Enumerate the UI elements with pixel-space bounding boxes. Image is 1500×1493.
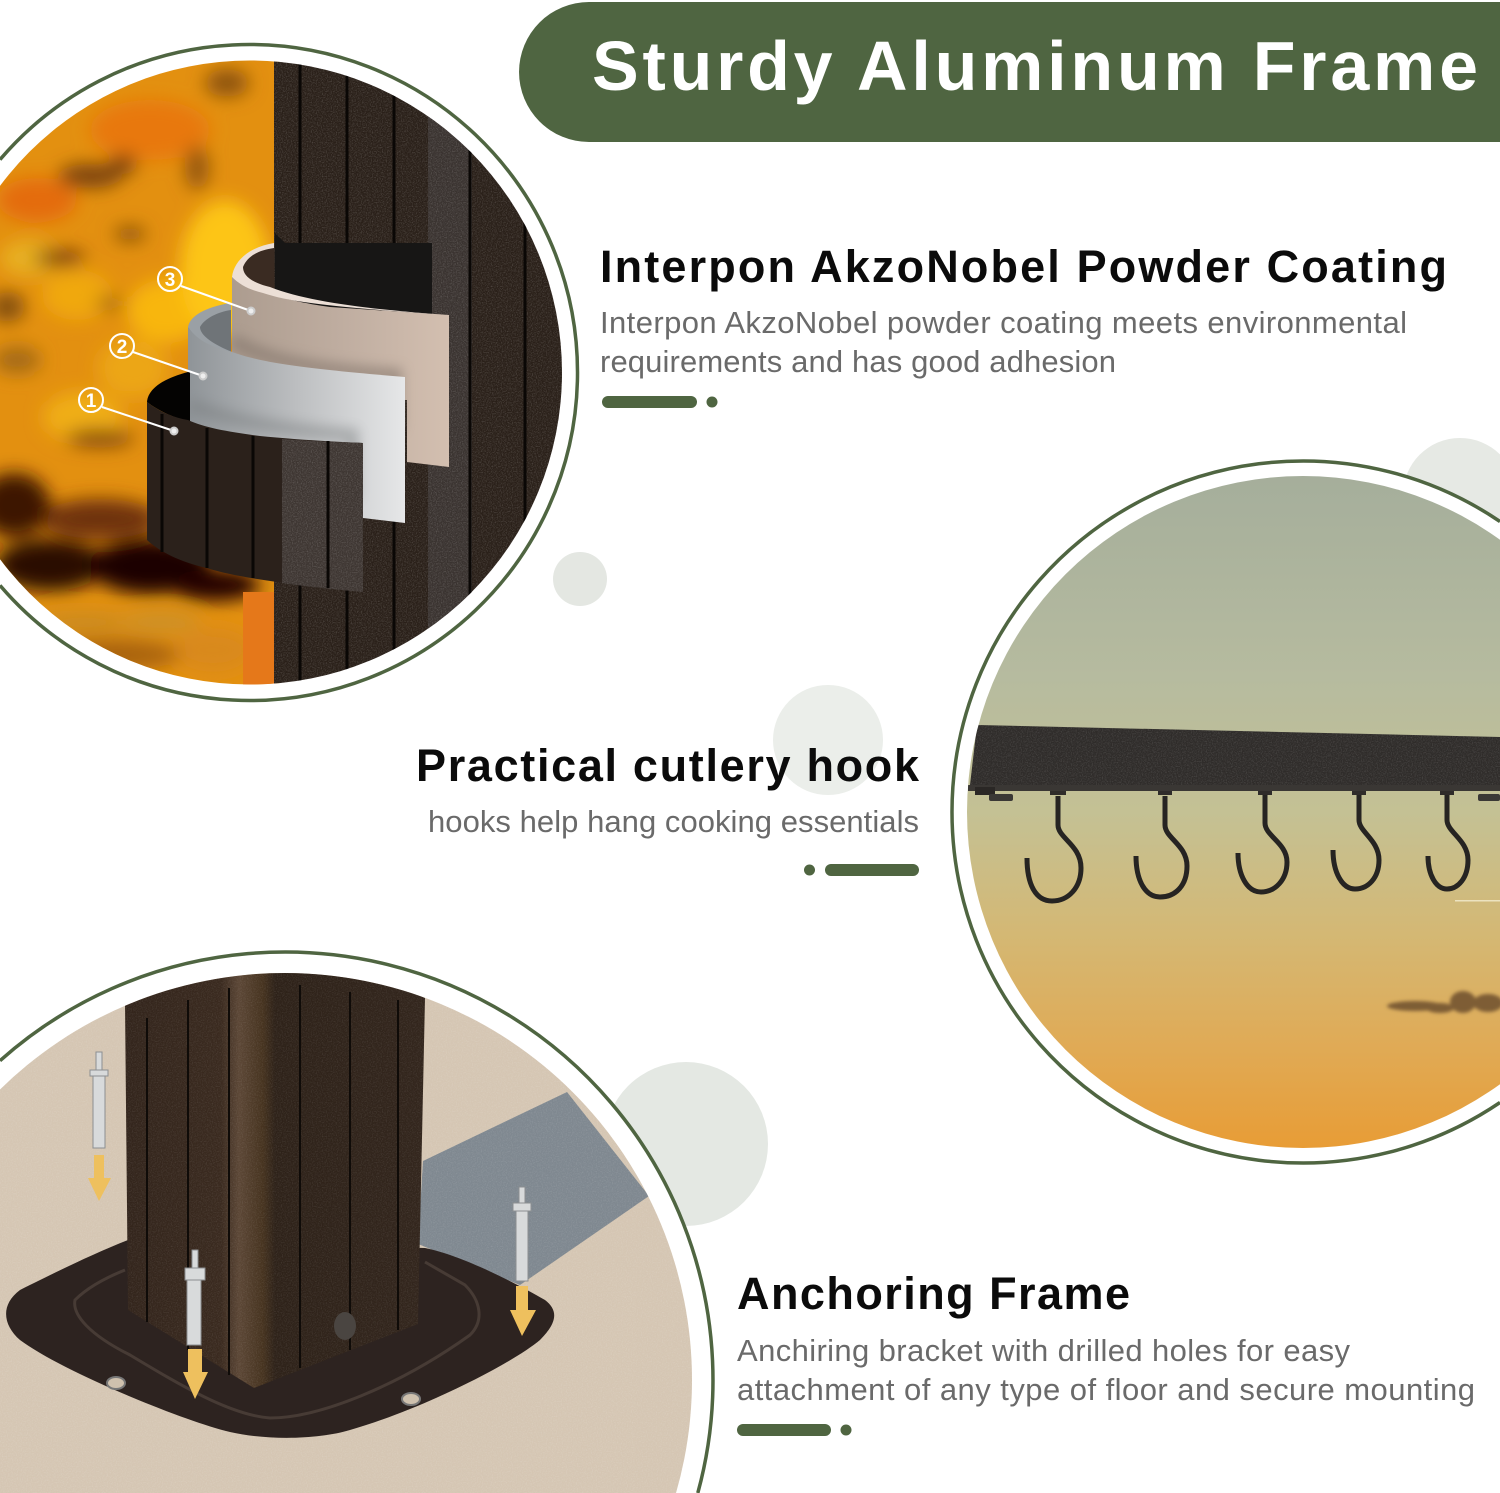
aluminium post <box>274 50 574 700</box>
text block: powder coating: Interpon AkzoNobel Powder Coating <box>600 241 1447 292</box>
panel: anchoring base photo <box>0 952 713 1493</box>
text block: cutlery hook <box>416 740 920 876</box>
callout numbers 1, 2, 3: 1 <box>86 391 97 412</box>
panel: powder coating cross-section photo <box>0 44 578 700</box>
faint line <box>1455 900 1500 902</box>
fire background <box>0 55 280 692</box>
decorative circle: lower middle <box>604 1062 768 1226</box>
concrete ground <box>0 970 700 1493</box>
post shadow <box>418 1092 649 1285</box>
layer 2: grey coat <box>188 303 405 523</box>
text block: cutlery hook: Practical cutlery hook <box>416 740 920 791</box>
anchor bolts <box>90 1052 531 1345</box>
panel: cutlery hooks photo <box>952 461 1500 1163</box>
text block: anchoring frame: Anchoring Frame <box>737 1268 1130 1319</box>
text block: powder coating <box>600 241 1447 408</box>
text block: cutlery hook: hooks help hang cooking essentials <box>428 804 919 839</box>
callout numbers 1, 2, 3: 3 <box>165 270 175 291</box>
layer 3: black inner and beige coat <box>232 233 449 467</box>
decorative circle: behind hook heading <box>773 685 883 795</box>
post <box>125 972 425 1388</box>
cloud <box>1387 991 1500 1013</box>
text block: powder coating: requirements and has good adhesion <box>600 344 1116 379</box>
text block: powder coating: Interpon AkzoNobel powder coating meets environmental <box>600 305 1407 340</box>
title banner: Sturdy Aluminum Frame <box>592 27 1478 105</box>
roof beam <box>968 725 1500 801</box>
base plate <box>6 1240 554 1438</box>
callout numbers 1, 2, 3 <box>79 267 254 434</box>
title banner <box>519 2 1500 142</box>
hooks <box>1027 795 1468 901</box>
text block: anchoring frame: attachment of any type of floor and secure mounting <box>737 1372 1475 1407</box>
sunset sky <box>960 475 1500 1150</box>
decorative circle: top right <box>1403 438 1500 552</box>
decorative circle: small <box>553 552 607 606</box>
layer 1: brown outer coat <box>147 372 363 592</box>
text block: anchoring frame: Anchiring bracket with drilled holes for easy <box>737 1333 1350 1368</box>
text block: anchoring frame <box>737 1268 1475 1436</box>
yellow arrows <box>88 1155 536 1399</box>
callout numbers 1, 2, 3: 2 <box>117 337 127 358</box>
